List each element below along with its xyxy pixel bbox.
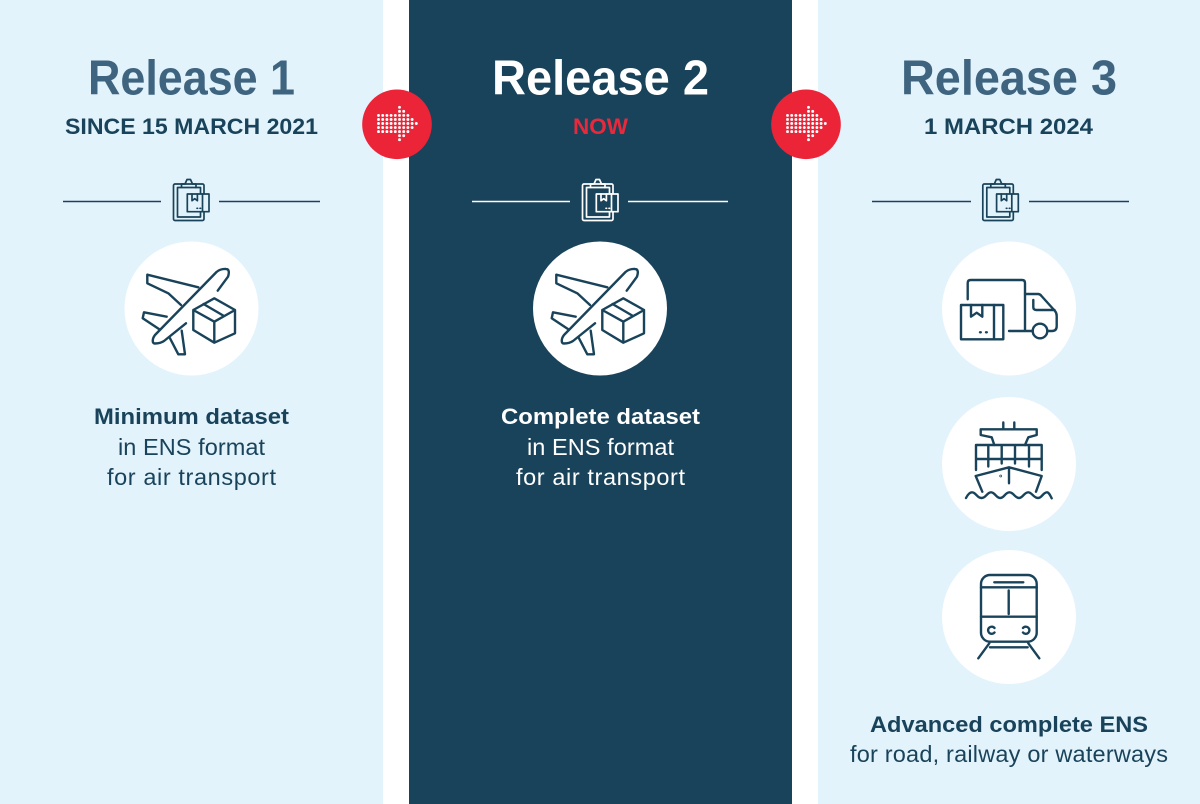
panel: release 3 background bbox=[818, 0, 1200, 804]
release 3 column bbox=[850, 52, 1168, 767]
date: release 3: 1 MARCH 2024 bbox=[924, 114, 1094, 139]
description: release 1: for air transport bbox=[107, 464, 276, 490]
panel: release 2 background bbox=[409, 0, 792, 804]
icon: train bbox=[942, 550, 1076, 684]
description: release 2: Complete dataset bbox=[501, 404, 701, 429]
icon: plane with parcel bbox=[124, 242, 258, 376]
description: release 2: for air transport bbox=[516, 464, 685, 490]
description: release 2: in ENS format bbox=[527, 434, 674, 460]
heading: release 3: Release 3 bbox=[901, 52, 1117, 106]
icon: truck bbox=[942, 242, 1076, 376]
arrow badge: release 1 to release 2 bbox=[362, 90, 432, 159]
release 1 column bbox=[63, 52, 320, 490]
icon: container ship bbox=[942, 397, 1076, 531]
arrow badge: release 2 to release 3 bbox=[771, 90, 841, 159]
description: release 1: Minimum dataset bbox=[94, 404, 290, 429]
divider with clipboard icon bbox=[63, 180, 320, 220]
date: release 1: SINCE 15 MARCH 2021 bbox=[65, 114, 318, 139]
description: release 1: in ENS format bbox=[118, 434, 265, 460]
heading: release 2: Release 2 bbox=[492, 52, 709, 106]
divider with clipboard icon bbox=[472, 180, 728, 220]
panel: release 1 background bbox=[0, 0, 383, 804]
heading: release 1: Release 1 bbox=[88, 52, 295, 106]
release 2 column bbox=[472, 52, 728, 490]
description: release 1 bbox=[94, 404, 290, 490]
status: now: NOW bbox=[573, 114, 629, 139]
description: release 3: Advanced complete ENS bbox=[870, 712, 1148, 737]
icon: plane with parcel bbox=[533, 242, 667, 376]
divider with clipboard icon bbox=[872, 180, 1129, 220]
description: release 2 bbox=[501, 404, 701, 490]
description: release 3: for road, railway or waterways bbox=[850, 741, 1168, 767]
description: release 3 bbox=[850, 712, 1168, 767]
